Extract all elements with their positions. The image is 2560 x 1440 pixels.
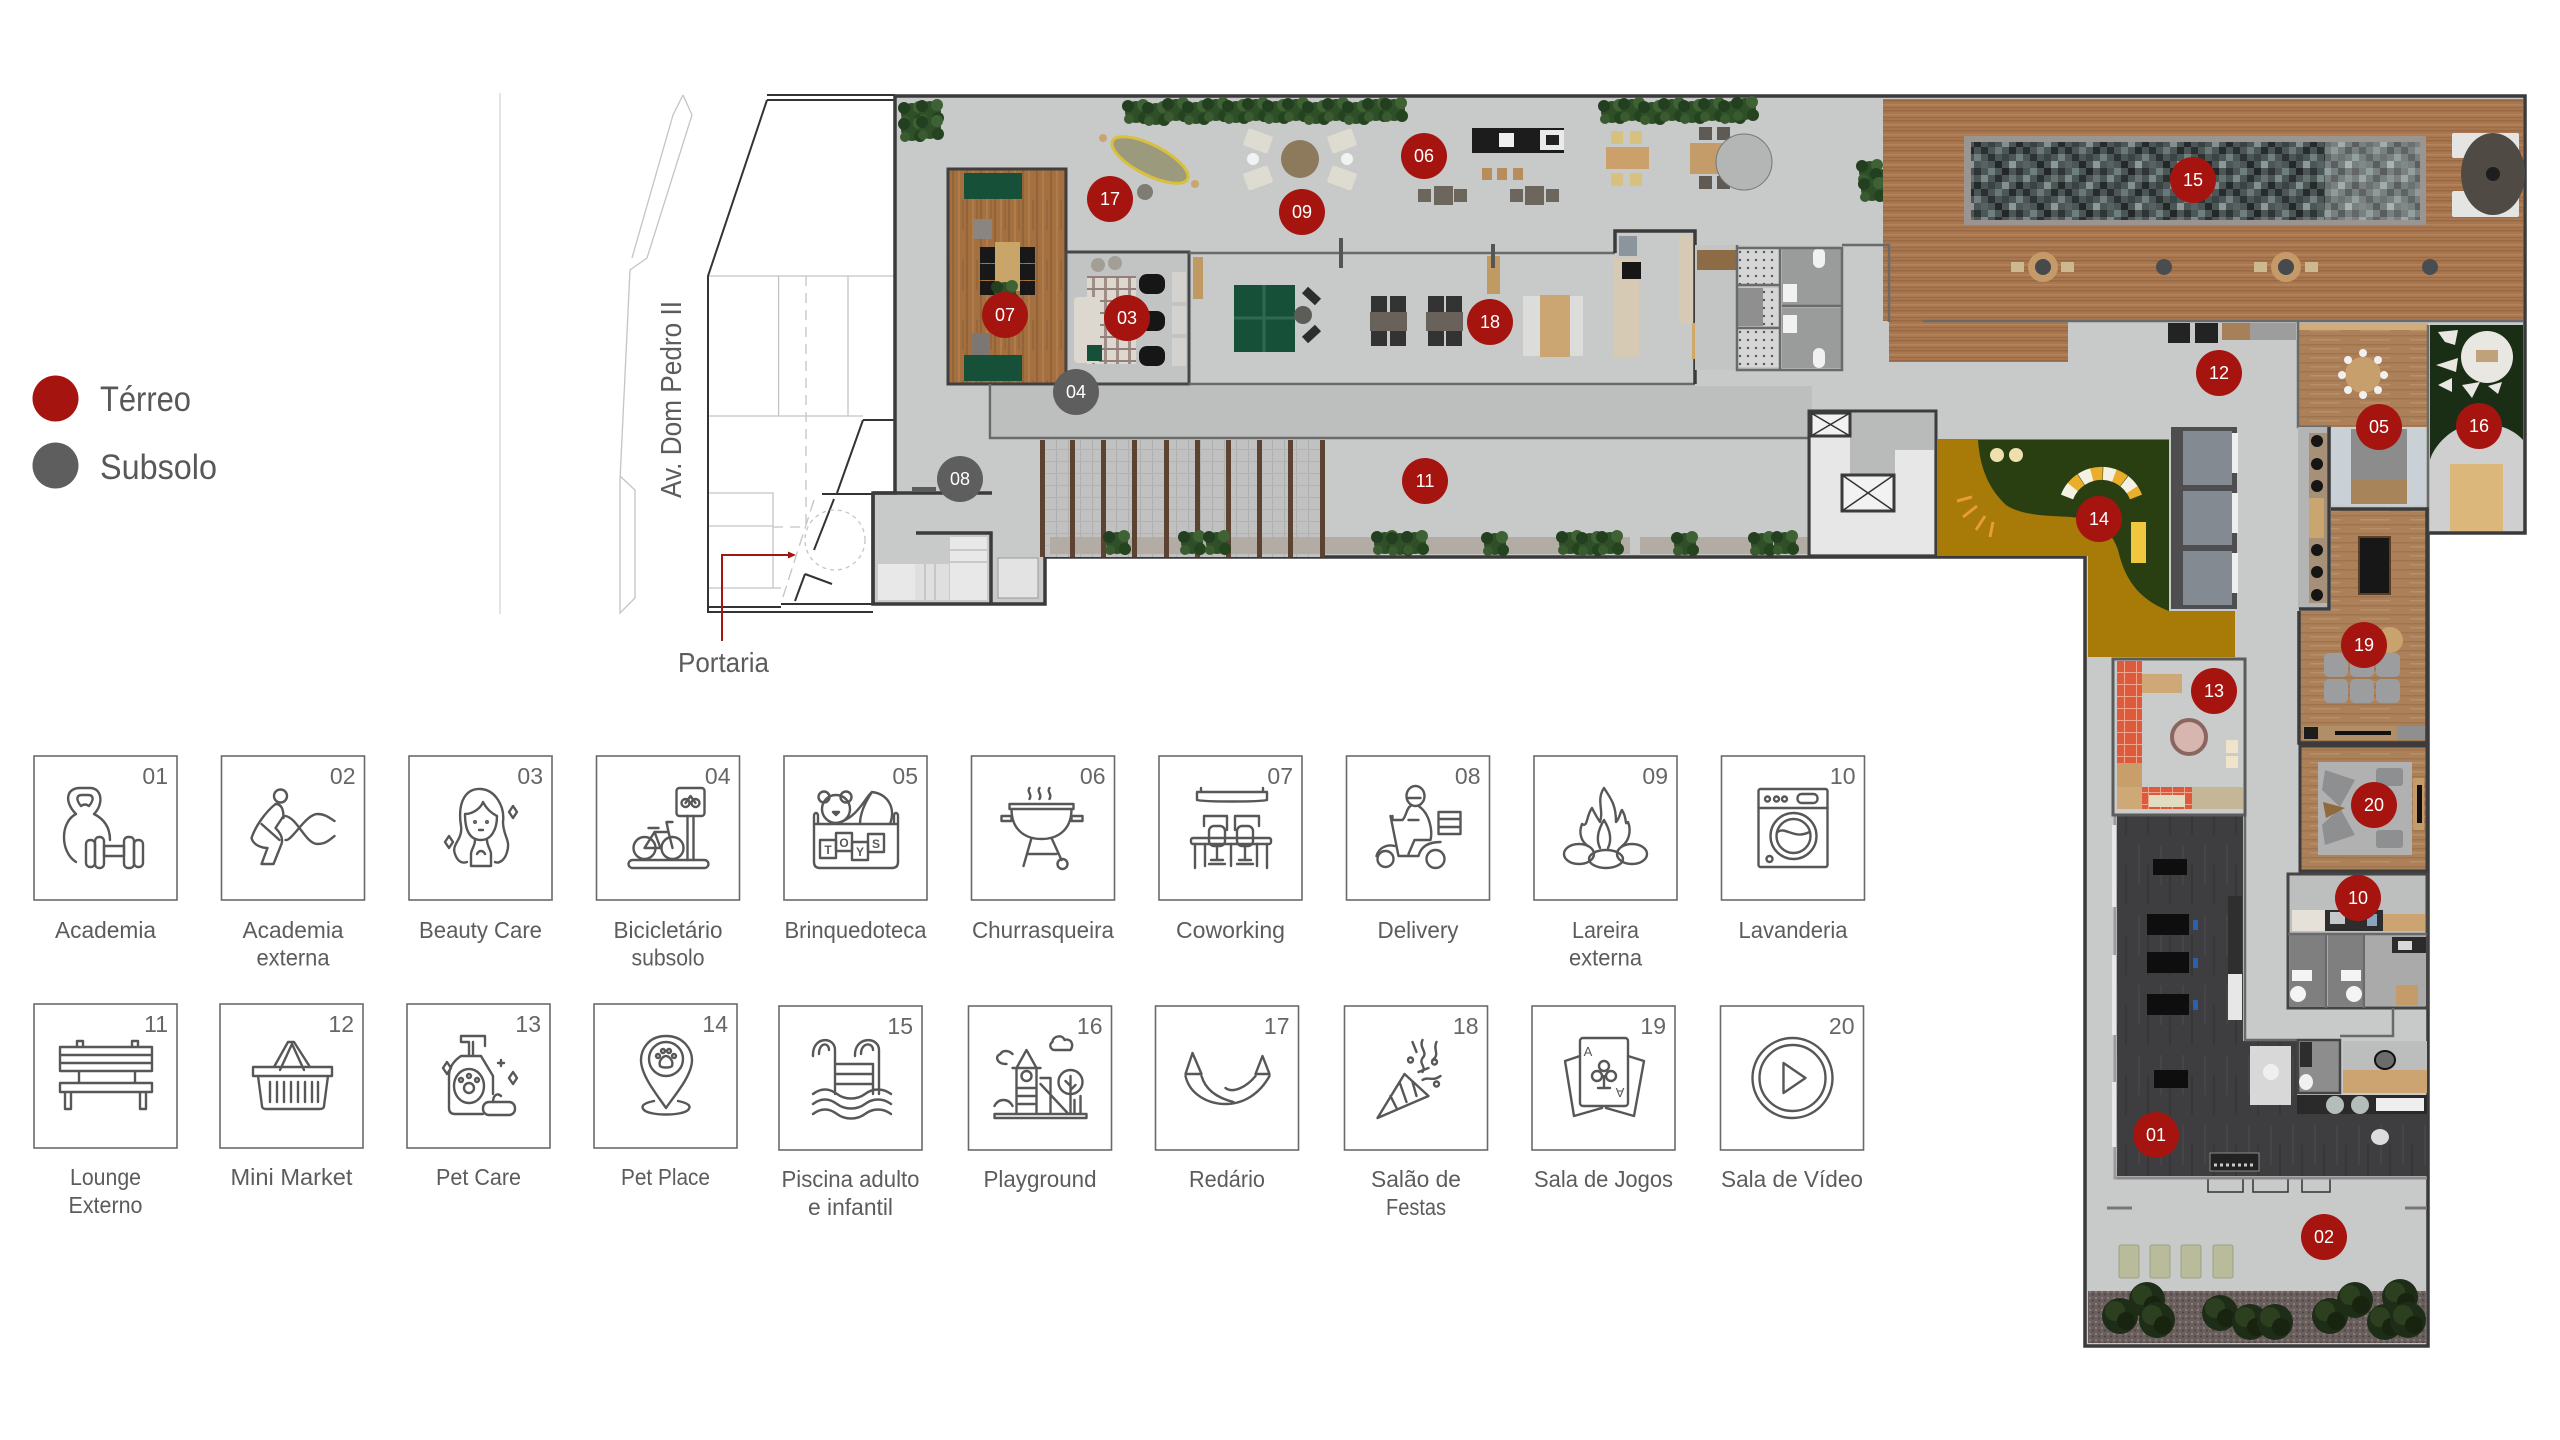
site outline: street and lot xyxy=(620,95,895,613)
rear bathroom and office xyxy=(2297,1008,2427,1114)
tile 11 Lounge Externo: Externo xyxy=(68,1192,142,1218)
tile 13 Pet Care xyxy=(407,1004,550,1190)
marker 19: 19 xyxy=(2354,635,2374,655)
floor slab xyxy=(873,96,2525,1346)
icon: pool ladder xyxy=(813,1040,891,1118)
icon: pet shampoo xyxy=(443,1036,517,1115)
tile 02 Academia externa: 02 xyxy=(330,763,356,789)
tile 04 Bicicletário subsolo: subsolo xyxy=(632,944,704,970)
tile 11 Lounge Externo: Lounge xyxy=(70,1164,141,1190)
icon letters: S xyxy=(872,837,880,851)
planting along top wall xyxy=(898,96,1898,202)
tile 12 Mini Market xyxy=(220,1004,363,1190)
icon: barbecue grill xyxy=(1002,788,1082,869)
room: restrooms xyxy=(1695,245,1889,370)
marker 13: 13 xyxy=(2204,681,2224,701)
tile 05 Brinquedoteca: Brinquedoteca xyxy=(784,917,927,943)
marker 09: 09 xyxy=(1292,202,1312,222)
tile 04 Bicicletário subsolo xyxy=(596,756,740,970)
tile 03 Beauty Care xyxy=(409,756,552,943)
tile 06 Churrasqueira xyxy=(972,756,1114,943)
area: outdoor gym 02 xyxy=(2088,1177,2427,1343)
marker 02 xyxy=(2301,1214,2347,1260)
tile 11 Lounge Externo: 11 xyxy=(144,1011,168,1037)
tile 15 Piscina adulto e infantil: e infantil xyxy=(808,1194,893,1220)
area: barbecue xyxy=(1418,127,1772,205)
tile 06 Churrasqueira: 06 xyxy=(1080,763,1106,789)
icon: delivery scooter xyxy=(1376,786,1460,868)
floor plan xyxy=(873,96,2525,1346)
icon: party popper xyxy=(1378,1040,1440,1118)
tile 19 Sala de Jogos xyxy=(1532,1006,1675,1192)
icon letters xyxy=(824,836,880,859)
tile 02 Academia externa xyxy=(222,756,364,970)
area: playground 16 xyxy=(2430,325,2523,531)
icon: kettlebell and dumbbell xyxy=(64,788,143,868)
tile 08 Delivery: 08 xyxy=(1455,763,1480,789)
tile 18 Salão de Festas xyxy=(1344,1006,1488,1220)
marker 18: 18 xyxy=(1480,312,1500,332)
corner bar: mini market shelves xyxy=(2168,323,2296,343)
marker 09 xyxy=(1279,189,1325,235)
icon letters: A xyxy=(1584,1044,1593,1059)
icon: battle ropes xyxy=(252,790,334,864)
marker 16 xyxy=(2456,403,2502,449)
tile 02 Academia externa: externa xyxy=(256,944,330,970)
marker 08: 08 xyxy=(950,469,970,489)
arrow: portaria xyxy=(722,552,796,641)
marker 14 xyxy=(2076,496,2122,542)
tile 15 Piscina adulto e infantil: Piscina adulto xyxy=(782,1166,920,1192)
tile 16 Playground: Playground xyxy=(984,1166,1096,1192)
room: games 19 xyxy=(2299,509,2427,743)
tile 18 Salão de Festas: Salão de xyxy=(1371,1166,1461,1192)
marker 19 xyxy=(2341,622,2387,668)
icon: hammock xyxy=(1186,1053,1270,1104)
icon: woman face xyxy=(445,789,517,866)
marker 11: 11 xyxy=(1416,471,1434,491)
marker 17 xyxy=(1087,176,1133,222)
tile 01 Academia: Academia xyxy=(55,917,156,943)
tile 16 Playground xyxy=(968,1006,1112,1192)
marker 13 xyxy=(2191,668,2237,714)
marker 17: 17 xyxy=(1100,189,1120,209)
marker 03 xyxy=(1104,295,1150,341)
marker 04: 04 xyxy=(1066,382,1086,402)
room: coworking 07 xyxy=(948,169,1066,384)
tile 01 Academia xyxy=(34,756,177,943)
icon: bike rack xyxy=(628,788,708,868)
room: video 20 xyxy=(2300,746,2427,871)
tile 07 Coworking: Coworking xyxy=(1176,917,1285,943)
room: pet care 13 xyxy=(2113,659,2245,815)
street name: Av. Dom Pedro II xyxy=(656,301,688,498)
legend item: Subsolo: Subsolo xyxy=(100,448,217,487)
tile 01 Academia: 01 xyxy=(142,763,168,789)
tile 05 Brinquedoteca xyxy=(784,756,927,943)
marker 07: 07 xyxy=(995,305,1015,325)
marker 11 xyxy=(1402,458,1448,504)
legend item: Térreo xyxy=(32,376,191,422)
tile 12 Mini Market: Mini Market xyxy=(230,1164,353,1190)
niche: storage column xyxy=(2298,427,2329,609)
tile 19 Sala de Jogos: 19 xyxy=(1640,1013,1666,1039)
marker 08 xyxy=(937,456,983,502)
icon: paw map pin xyxy=(641,1036,692,1114)
marker 01: 01 xyxy=(2146,1125,2166,1145)
marker 10: 10 xyxy=(2348,888,2368,908)
tile 19 Sala de Jogos: Sala de Jogos xyxy=(1534,1166,1673,1192)
icon: toy box xyxy=(814,792,898,868)
marker 05 xyxy=(2356,404,2402,450)
legend item: Subsolo xyxy=(32,442,217,488)
tile 20 Sala de Vídeo: Sala de Vídeo xyxy=(1721,1166,1863,1192)
icon: bench xyxy=(60,1041,152,1109)
tile 06 Churrasqueira: Churrasqueira xyxy=(972,917,1114,943)
tile 17 Redário xyxy=(1156,1006,1298,1192)
icon letters: Y xyxy=(856,845,864,859)
tile 14 Pet Place: 14 xyxy=(702,1011,728,1037)
icon letters: O xyxy=(839,836,849,850)
corridor walls xyxy=(990,384,1809,438)
icon letters: T xyxy=(824,843,832,857)
deck loungers and parasol xyxy=(2452,133,2525,217)
marker 03: 03 xyxy=(1117,308,1137,328)
marker 20: 20 xyxy=(2364,795,2384,815)
marker 06 xyxy=(1401,133,1447,179)
tile 10 Lavanderia: Lavanderia xyxy=(1738,917,1848,943)
tile 14 Pet Place xyxy=(594,1004,737,1190)
tile 09 Lareira externa: 09 xyxy=(1642,763,1668,789)
tile 15 Piscina adulto e infantil xyxy=(779,1006,922,1220)
tile 02 Academia externa: Academia xyxy=(242,917,344,943)
tile 18 Salão de Festas: Festas xyxy=(1386,1194,1446,1220)
room: pet wash cabins xyxy=(2171,427,2238,609)
tile 20 Sala de Vídeo xyxy=(1720,1006,1864,1192)
marker 16: 16 xyxy=(2469,416,2489,436)
tile 03 Beauty Care: 03 xyxy=(517,763,543,789)
area: fire pit 09 xyxy=(1243,128,1357,191)
marker 15 xyxy=(2170,157,2216,203)
room: gym 01 xyxy=(2112,815,2427,1178)
tile 18 Salão de Festas: 18 xyxy=(1453,1013,1478,1039)
marker 10 xyxy=(2335,875,2381,921)
corridor shading xyxy=(992,386,1812,438)
tile 17 Redário: Redário xyxy=(1189,1166,1265,1192)
tile 12 Mini Market: 12 xyxy=(328,1011,354,1037)
icon: coworking desks xyxy=(1191,788,1271,868)
tile 09 Lareira externa: Lareira xyxy=(1572,917,1639,943)
marker 18 xyxy=(1467,299,1513,345)
marker 20 xyxy=(2351,782,2397,828)
marker 12 xyxy=(2196,350,2242,396)
tile 07 Coworking xyxy=(1159,756,1302,943)
area: lounge pergola 11 xyxy=(1040,440,1810,557)
tile 15 Piscina adulto e infantil: 15 xyxy=(887,1013,913,1039)
amenities legend xyxy=(34,756,1864,1220)
tile 09 Lareira externa: externa xyxy=(1569,944,1642,970)
icon: playground xyxy=(994,1036,1086,1118)
panel: pool deck xyxy=(1883,99,2525,362)
tile 20 Sala de Vídeo: 20 xyxy=(1829,1013,1854,1039)
marker 07 xyxy=(982,292,1028,338)
tile 04 Bicicletário subsolo: 04 xyxy=(705,763,731,789)
area: pet place 14 xyxy=(1937,439,2235,657)
tile 10 Lavanderia xyxy=(1722,756,1864,943)
tile 10 Lavanderia: 10 xyxy=(1830,763,1856,789)
room: kitchen xyxy=(1613,231,1698,384)
icon: basket xyxy=(253,1042,332,1109)
icon: washing machine xyxy=(1758,789,1828,867)
deck seats xyxy=(2011,252,2438,282)
tile 08 Delivery: Delivery xyxy=(1378,917,1459,943)
tile 13 Pet Care: 13 xyxy=(515,1011,541,1037)
marker 05: 05 xyxy=(2369,417,2389,437)
tile 13 Pet Care: Pet Care xyxy=(436,1164,521,1190)
icon: playing cards xyxy=(1565,1038,1644,1116)
marker 01 xyxy=(2133,1112,2179,1158)
tile 08 Delivery xyxy=(1346,756,1490,943)
pool xyxy=(1964,136,2426,225)
icon letters: A xyxy=(1615,1085,1624,1100)
tile 07 Coworking: 07 xyxy=(1267,763,1293,789)
icon letters xyxy=(1584,1044,1624,1100)
area: hammock 17 xyxy=(1099,128,1199,200)
entrance block: stairs and delivery xyxy=(873,487,1038,604)
marker 15: 15 xyxy=(2183,170,2203,190)
label: Portaria: Portaria xyxy=(678,647,769,678)
room: laundry 10 xyxy=(2288,874,2427,1008)
marker 06: 06 xyxy=(1414,146,1434,166)
icon: play button xyxy=(1752,1038,1832,1118)
icon: fire pit xyxy=(1564,788,1647,868)
tile 16 Playground: 16 xyxy=(1077,1013,1102,1039)
tile 11 Lounge Externo xyxy=(34,1004,177,1218)
room: toy library 05 xyxy=(2298,320,2428,533)
legend xyxy=(32,376,217,488)
tile 14 Pet Place: Pet Place xyxy=(621,1164,710,1190)
tile 04 Bicicletário subsolo: Bicicletário xyxy=(614,917,722,943)
marker 14: 14 xyxy=(2089,509,2109,529)
marker 04 xyxy=(1053,369,1099,415)
stair core xyxy=(1809,411,1936,556)
room: party hall 18 xyxy=(1189,238,1695,384)
legend item: Térreo: Térreo xyxy=(100,380,191,419)
tile 17 Redário: 17 xyxy=(1264,1013,1290,1039)
marker 02: 02 xyxy=(2314,1227,2334,1247)
room: beauty care 03 xyxy=(1066,252,1203,384)
tile 03 Beauty Care: Beauty Care xyxy=(419,917,542,943)
markers xyxy=(937,133,2502,1260)
tile 05 Brinquedoteca: 05 xyxy=(892,763,918,789)
marker 12: 12 xyxy=(2209,363,2229,383)
tile 09 Lareira externa xyxy=(1534,756,1677,970)
